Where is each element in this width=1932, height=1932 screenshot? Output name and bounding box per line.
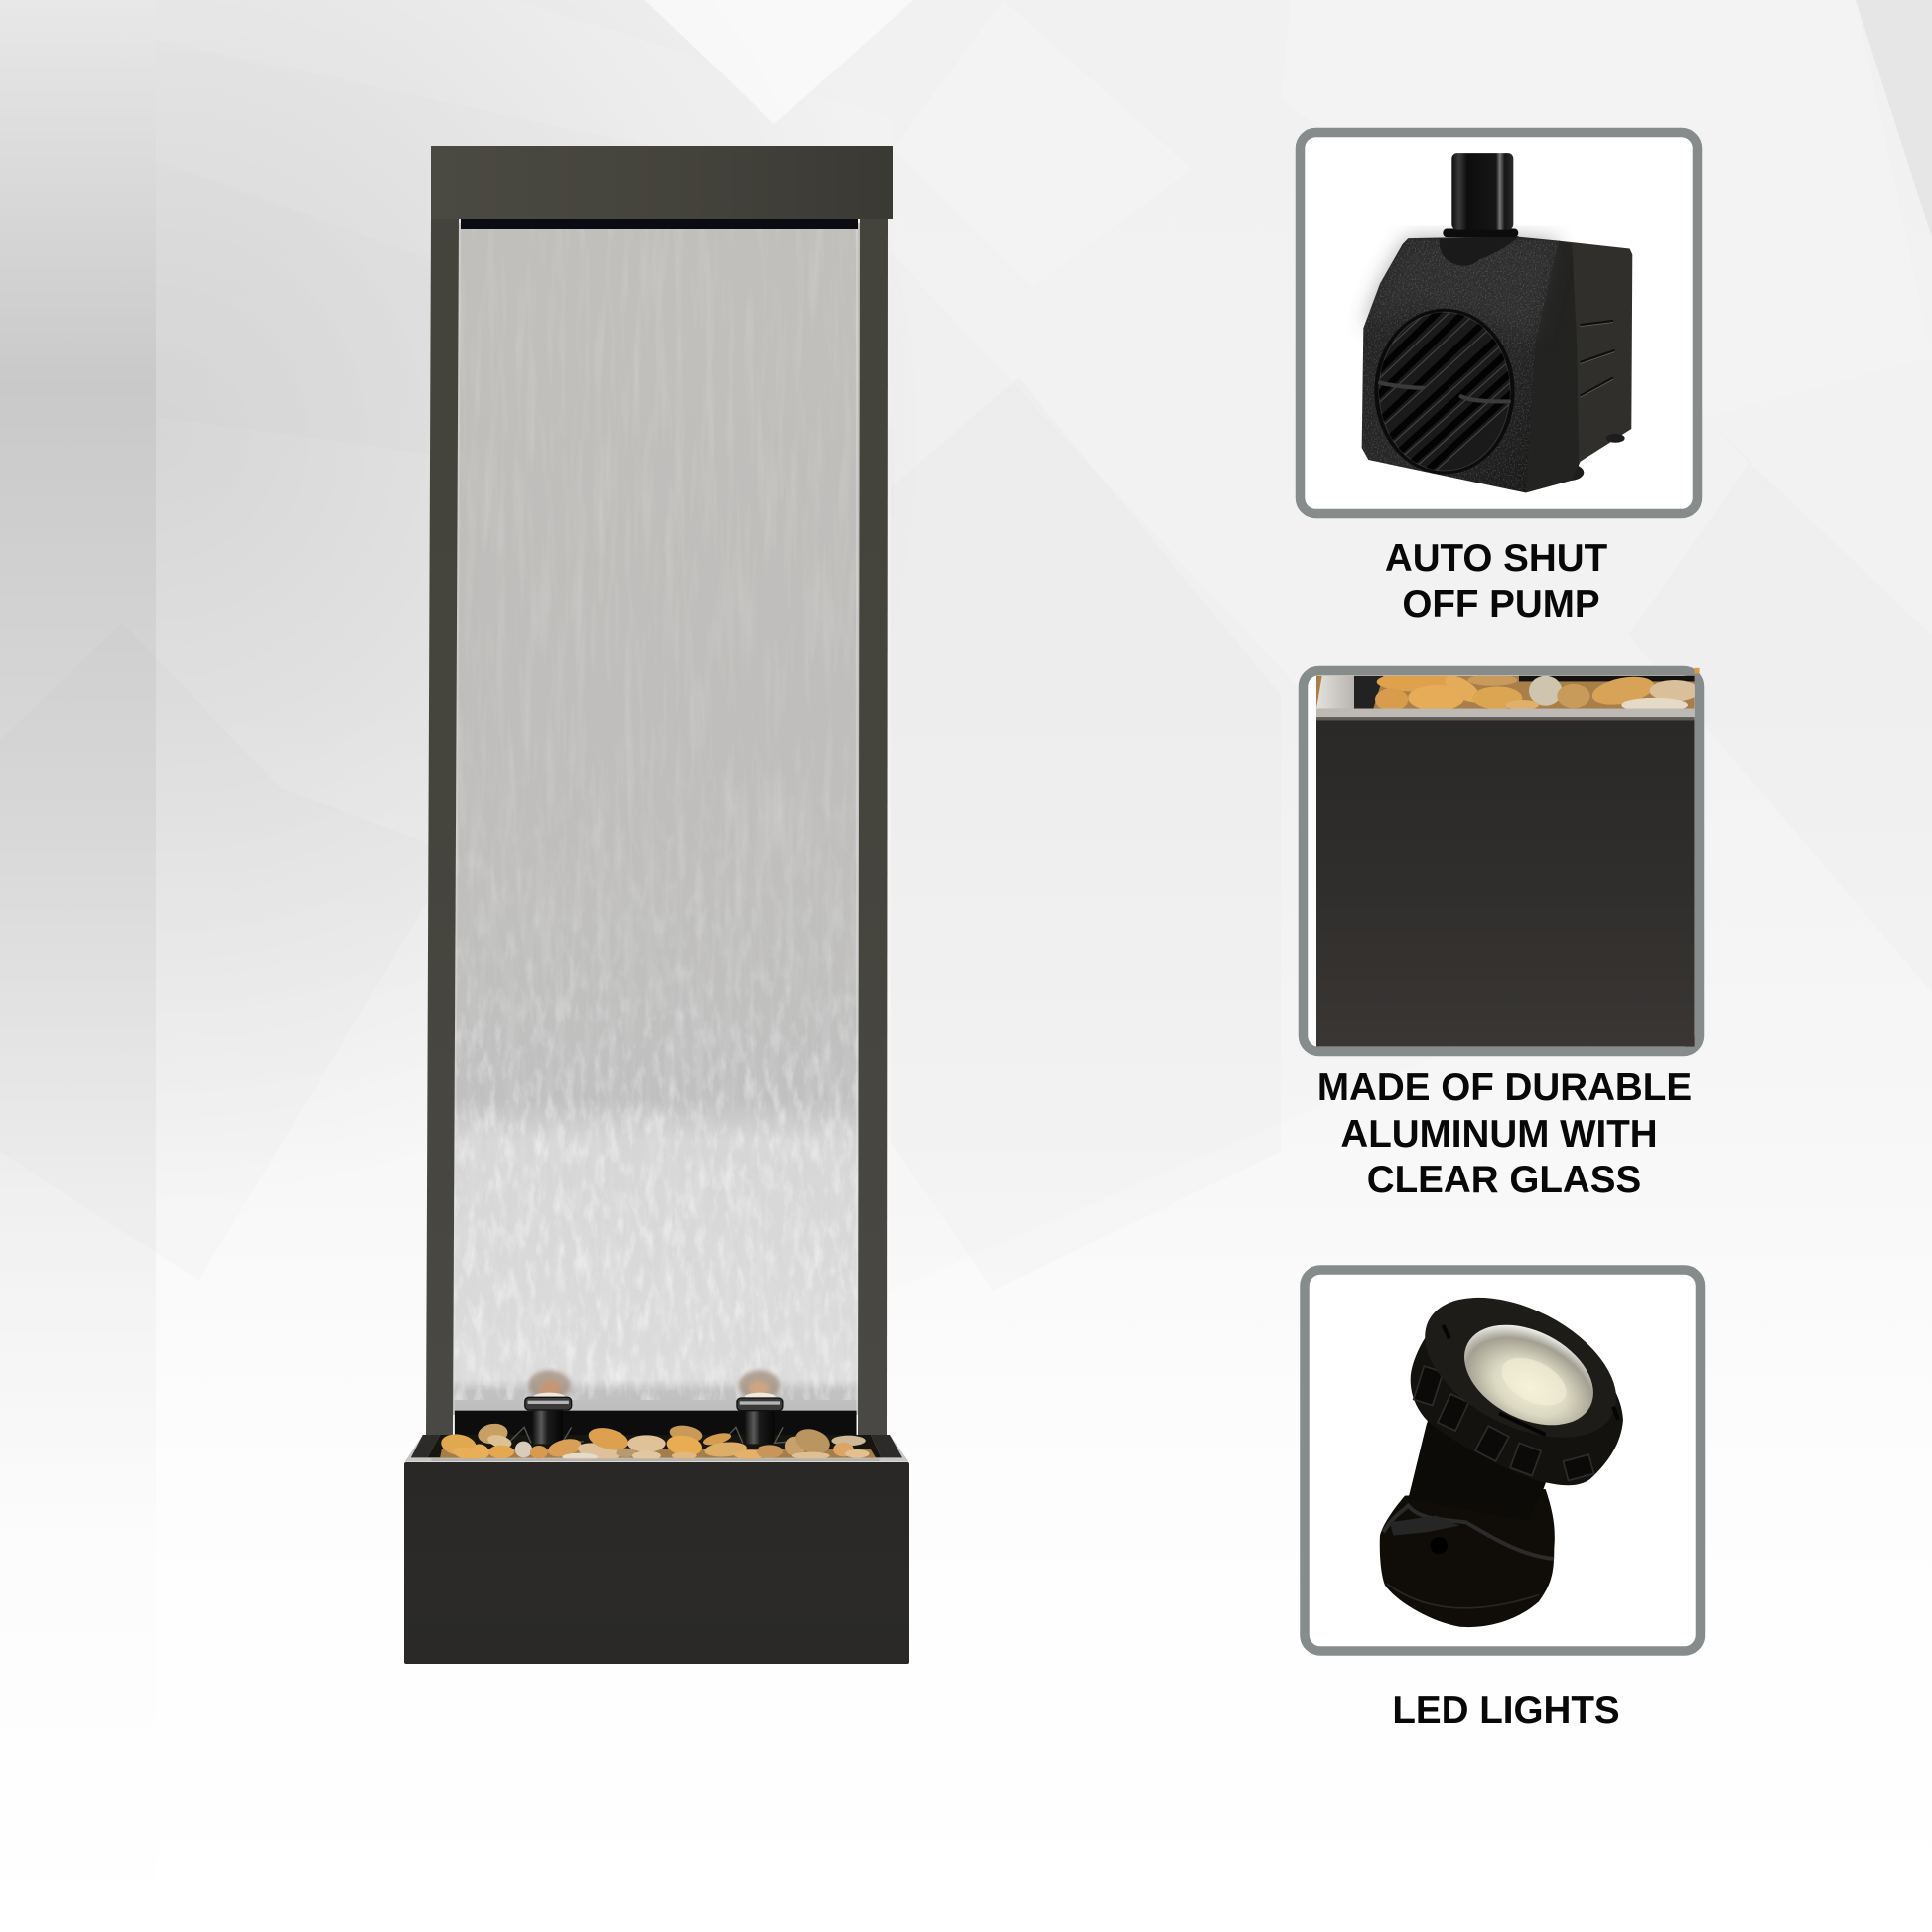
trough and pebbles (local coordinates from the base crop): [405, 1370, 909, 1462]
river pebbles: [439, 1422, 876, 1462]
right frame post: [858, 219, 888, 1435]
water outlet slot: [461, 219, 858, 229]
panel: auto shut off pump: [1301, 133, 1698, 625]
lip front highlight: [431, 1458, 880, 1461]
card frame: [1301, 133, 1698, 514]
light fixture left: [510, 1370, 584, 1444]
caption: ALUMINUM WITH: [1340, 1113, 1658, 1156]
panel: durable aluminum with clear glass: [1303, 668, 1700, 1201]
card frame: [1305, 1270, 1700, 1651]
top cap: [431, 146, 893, 219]
caption: [1317, 1066, 1692, 1201]
light fixture right: [722, 1370, 795, 1444]
icon: submersible pump: [1362, 153, 1632, 492]
main product: glass waterfall fountain: [404, 146, 909, 1664]
caption: [1385, 537, 1608, 625]
left frame post: [426, 219, 459, 1435]
base planter box: [404, 1462, 909, 1664]
glass water panel: [453, 223, 860, 1415]
trough lip: [405, 1435, 909, 1462]
icon: LED spotlight: [1380, 1269, 1639, 1627]
caption: MADE OF DURABLE: [1317, 1066, 1692, 1109]
card frame: [1303, 671, 1700, 1052]
caption: OFF PUMP: [1402, 583, 1600, 625]
caption: AUTO SHUT: [1385, 537, 1608, 580]
black pump bar: [455, 1411, 857, 1437]
photo: planter close-up: [1316, 668, 1700, 1047]
caption: LED LIGHTS: [1392, 1689, 1620, 1731]
caption: CLEAR GLASS: [1367, 1159, 1641, 1201]
panel: LED lights: [1305, 1269, 1700, 1731]
